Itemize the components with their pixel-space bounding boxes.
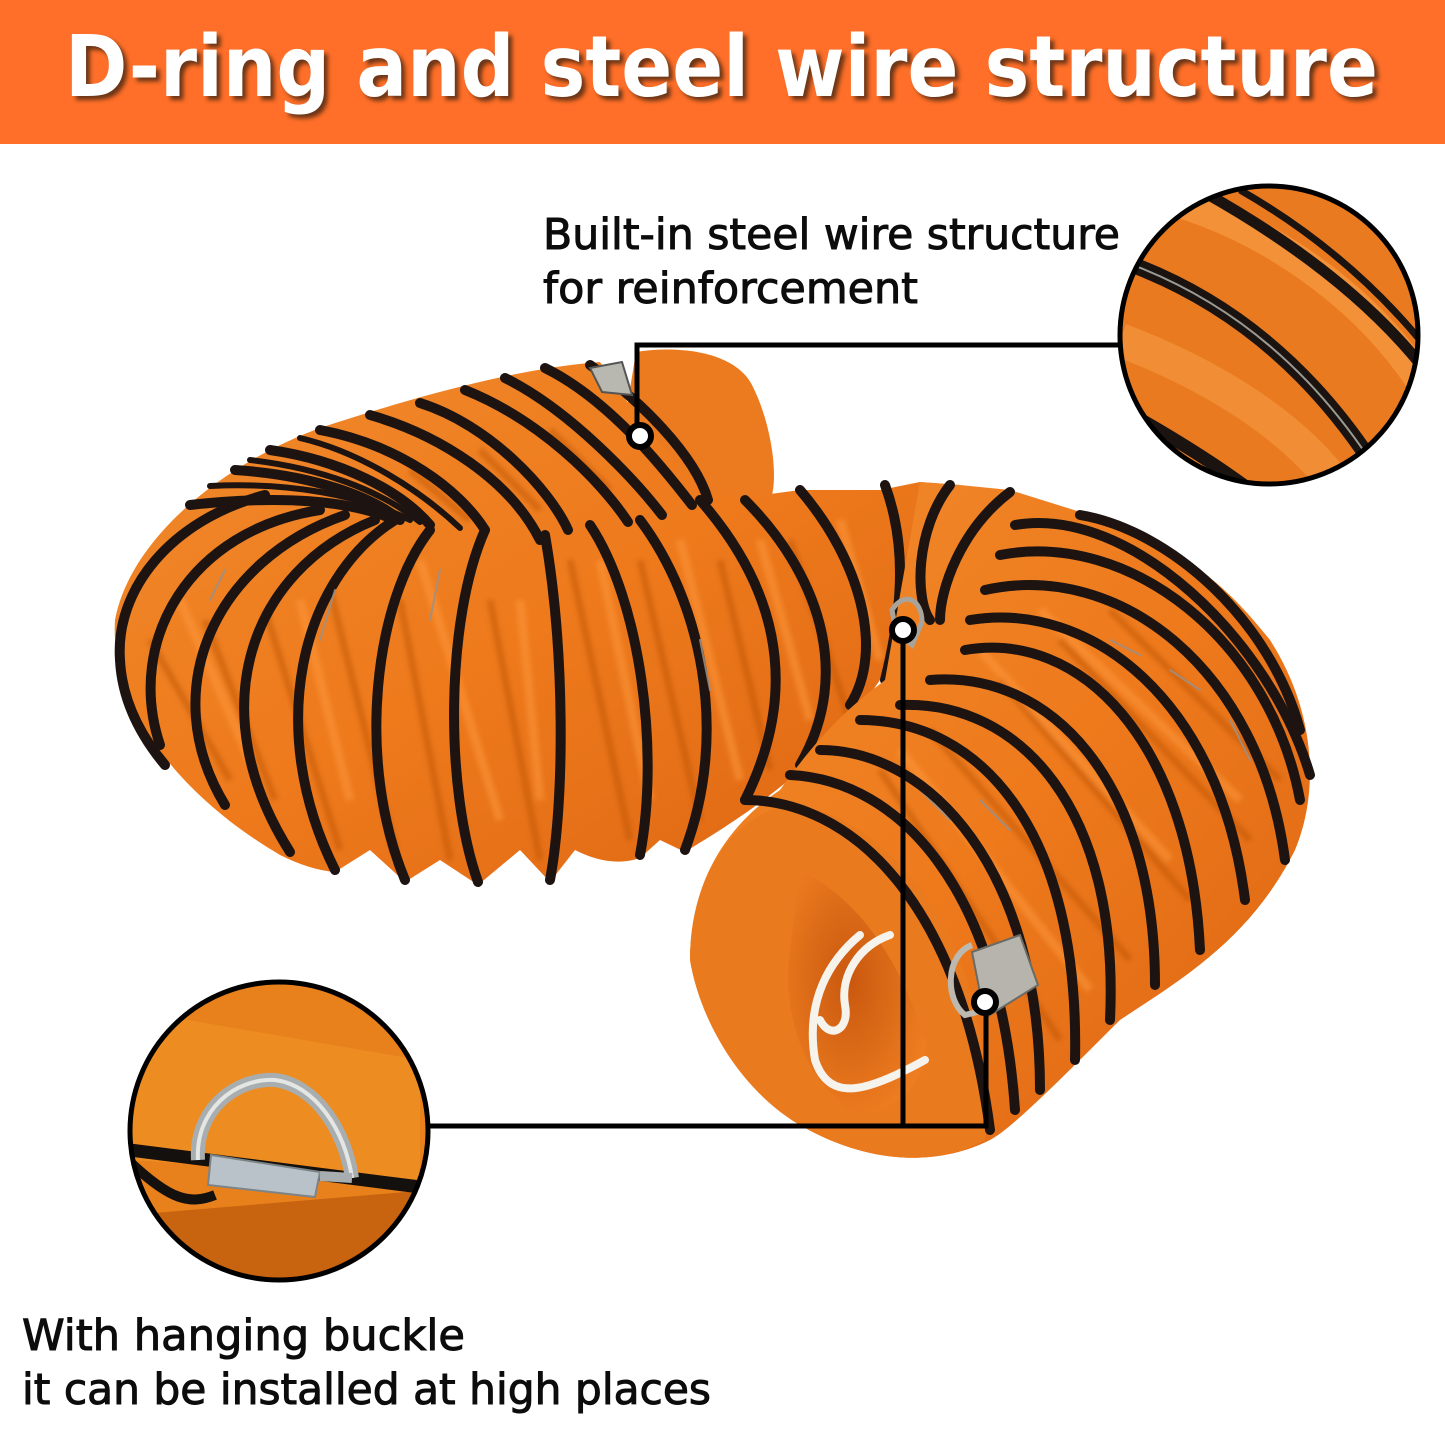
callout line: steel wire	[637, 345, 1120, 436]
text: hanging buckle callout: With hanging buckle	[22, 1311, 465, 1361]
inset: D-ring close-up	[125, 980, 435, 1290]
lower hose body	[690, 482, 1310, 1158]
text: steel wire callout: Built-in steel wire structure	[543, 210, 1120, 260]
end wire ribs	[745, 750, 1040, 1130]
text: steel wire callout	[543, 210, 1120, 314]
duct hose illustration	[115, 350, 1310, 1158]
wire ribs, upper hose	[120, 365, 900, 882]
inset: steel wire close-up	[1115, 185, 1425, 490]
marker: top clip	[629, 425, 651, 447]
pleats	[880, 610, 1280, 1040]
header banner	[0, 0, 1445, 144]
upper hose body	[115, 362, 960, 885]
open hose end	[690, 805, 987, 1158]
metal bracket and D-ring	[951, 935, 1038, 1018]
text: steel wire callout: for reinforcement	[543, 264, 918, 314]
metal clip, top	[590, 362, 632, 395]
text: hanging buckle callout: it can be installed at high places	[22, 1365, 711, 1415]
D-ring, middle	[892, 599, 922, 645]
white rope	[813, 935, 925, 1088]
callout line: hanging buckle	[430, 630, 986, 1126]
hose far end flare	[625, 350, 774, 510]
marker: end D-ring	[974, 991, 996, 1013]
marker: middle D-ring	[892, 619, 914, 641]
pleats	[150, 430, 880, 860]
wire ribs, lower hose	[860, 485, 1310, 1060]
text: hanging buckle callout	[22, 1311, 711, 1415]
